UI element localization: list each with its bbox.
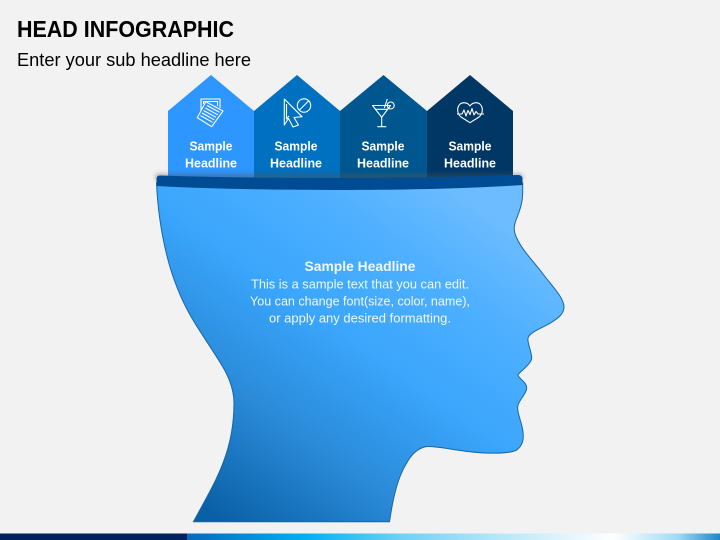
head silhouette	[156, 183, 564, 522]
label: Sample	[362, 138, 404, 154]
head top band	[156, 175, 522, 190]
title: HEAD INFOGRAPHIC	[17, 16, 234, 42]
band shadow	[155, 174, 523, 180]
subtitle: Enter your sub headline here	[17, 49, 251, 70]
icon: cocktail glass	[372, 99, 394, 127]
label: Sample	[274, 138, 318, 154]
footer bar	[0, 534, 720, 540]
tab 4	[427, 75, 513, 180]
body line 2: You can change font(size, color, name),	[250, 294, 470, 308]
arrow tabs	[168, 75, 513, 180]
body heading: Sample Headline	[304, 259, 416, 274]
tab 3	[340, 75, 427, 180]
label: Sample	[448, 138, 492, 154]
label: Headline	[270, 156, 322, 170]
label: Headline	[185, 156, 237, 170]
body line 1: This is a sample text that you can edit.	[251, 276, 469, 292]
tab 2	[254, 75, 340, 180]
icon: documents	[197, 99, 223, 127]
icon: cursor with block sign	[284, 99, 311, 127]
body text	[250, 259, 470, 326]
icon: heart with pulse	[457, 103, 484, 123]
label: Headline	[444, 156, 496, 170]
body line 3: or apply any desired formatting.	[269, 310, 451, 326]
label: Headline	[357, 156, 409, 170]
label: Sample	[190, 138, 232, 154]
tab 1	[168, 75, 254, 180]
